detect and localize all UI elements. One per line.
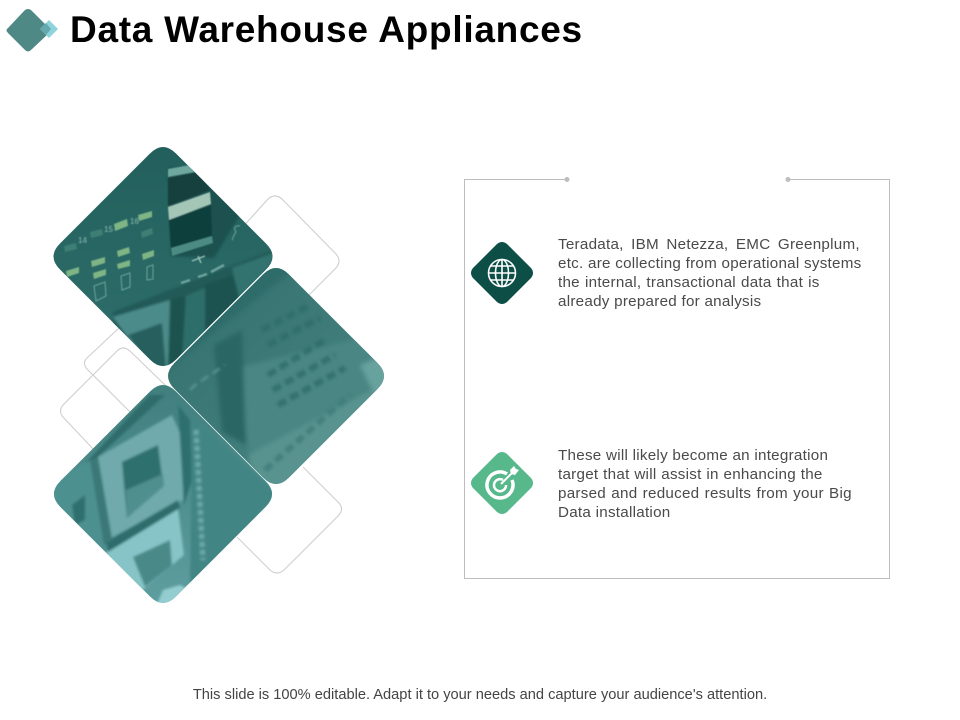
photo diamond: top: 16 [130, 217, 139, 226]
text panel frame [464, 177, 890, 578]
text block: vendors: already prepared for analysis [558, 293, 761, 310]
photo diamond: top [54, 147, 272, 366]
text block: integration target: parsed and reduced results from your Big [558, 485, 852, 502]
icon: target [471, 452, 533, 514]
photo diamond: top: 14 [78, 236, 87, 245]
text block: integration target: Data installation [558, 504, 670, 521]
main graphic: logo, diamonds, panel, icons [6, 9, 890, 603]
icon: globe [471, 242, 533, 304]
text block: vendors: the internal, transactional data that is [558, 274, 820, 291]
text block: integration target [558, 447, 852, 521]
footer note: This slide is 100% editable. Adapt it to your needs and capture your audience's attention. [193, 687, 767, 703]
title: Data Warehouse Appliances [70, 9, 583, 50]
photo diamond: bottom [54, 385, 272, 603]
photo diamond: middle [168, 268, 384, 484]
logo icon [6, 9, 58, 52]
outline diamonds behind photos [60, 196, 342, 573]
text block: vendors: Teradata, IBM Netezza, EMC Greenplum, [558, 236, 860, 253]
text block: vendors [558, 236, 862, 310]
text block: integration target: These will likely become an integration [558, 447, 828, 464]
text block: integration target: target that will assist in enhancing the [558, 466, 823, 483]
text block: vendors: etc. are collecting from operational systems [558, 255, 862, 272]
photo diamond: top: 15 [104, 225, 113, 234]
